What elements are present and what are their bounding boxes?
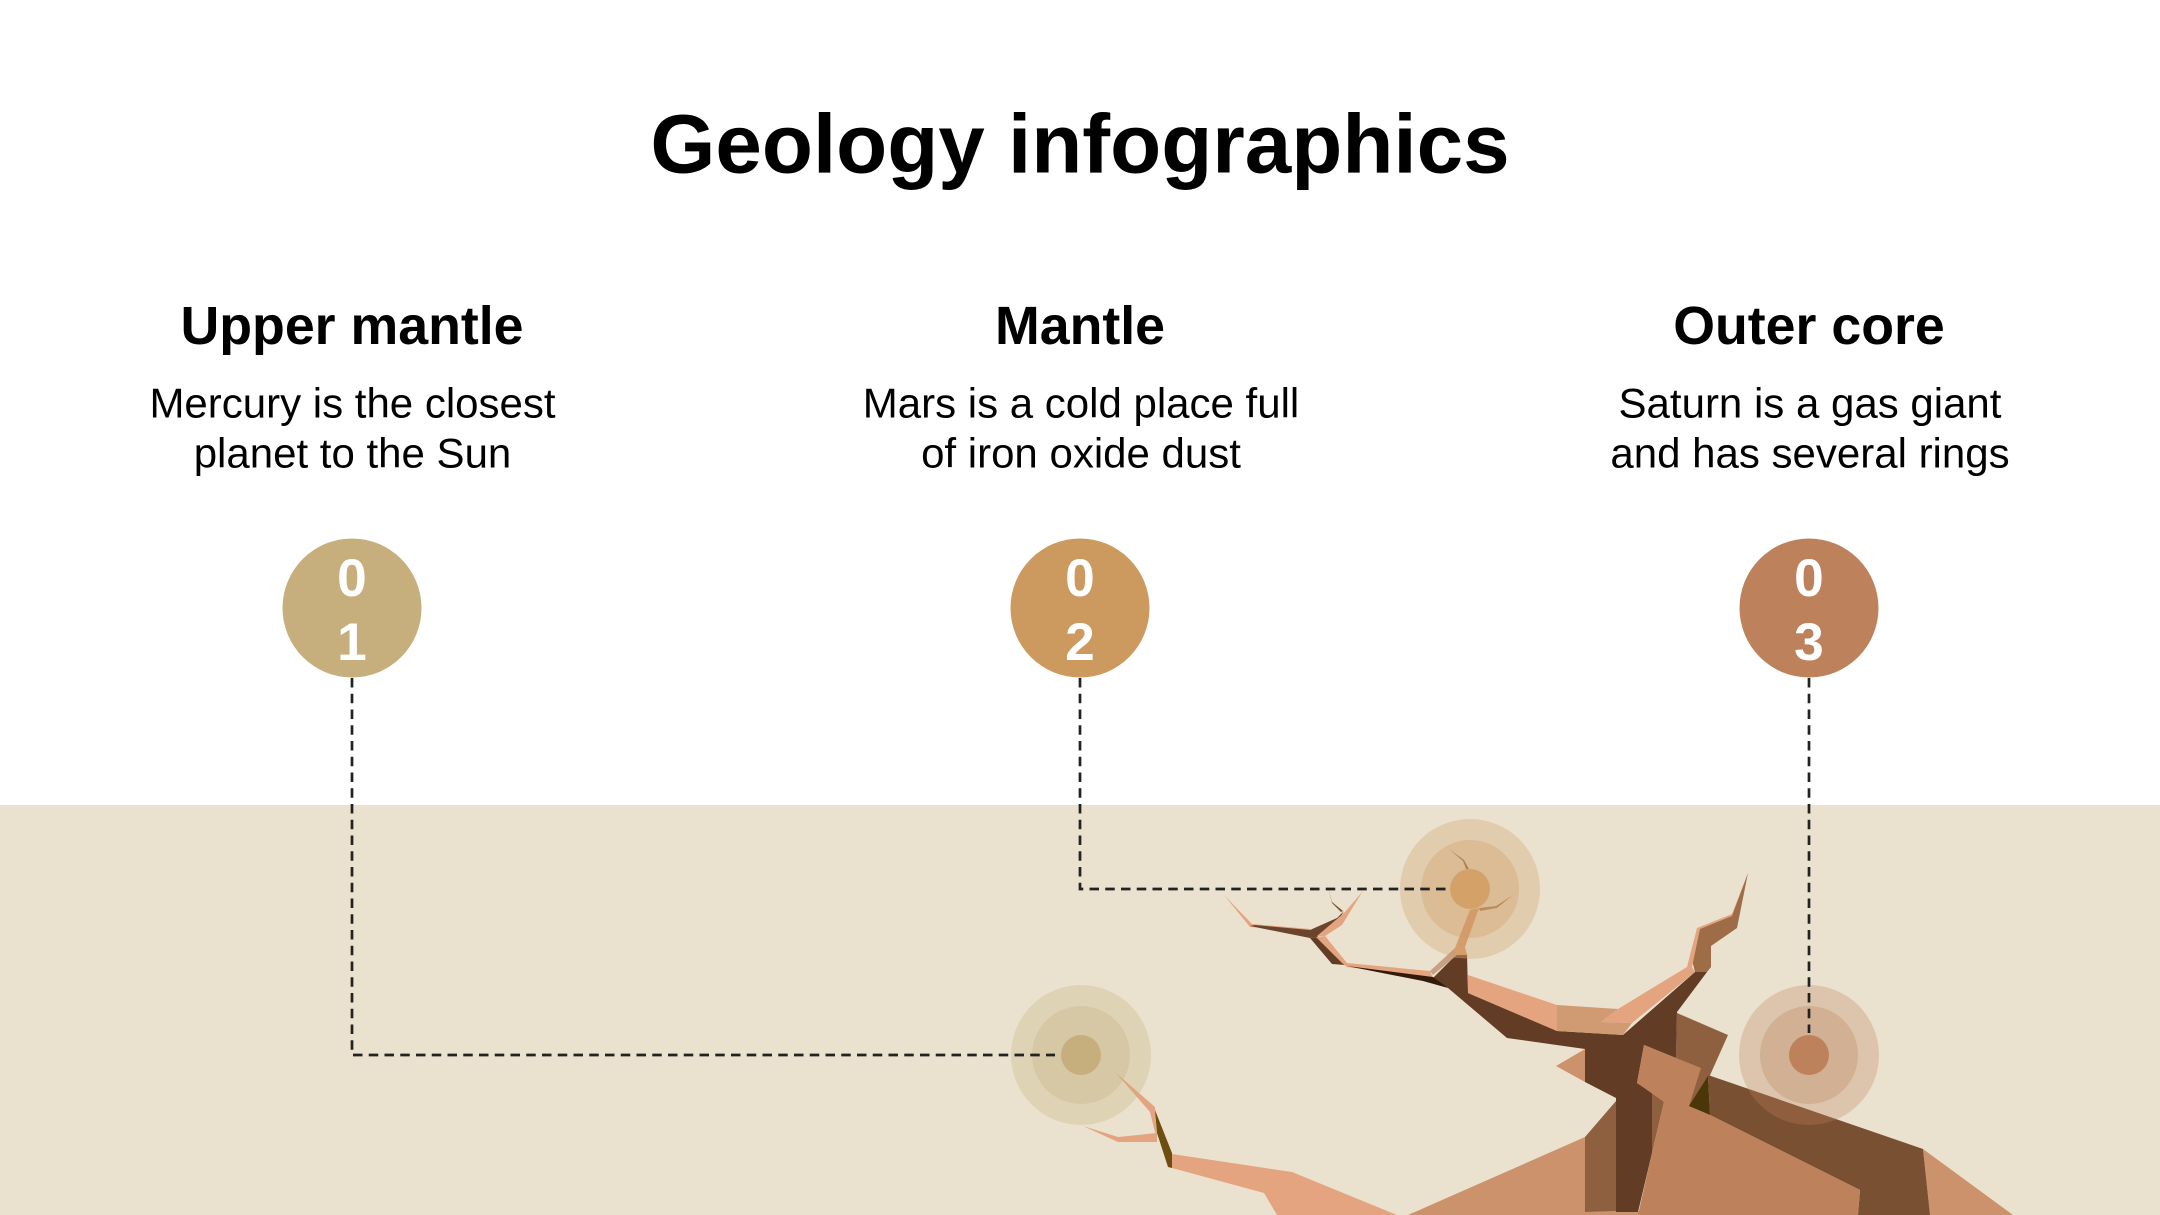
column 3: outer core text (1610, 296, 2010, 476)
connector 2 (1080, 678, 1446, 889)
description: upper mantle: Mercury is the closest (149, 380, 556, 426)
number badge 02: 0 (1065, 549, 1095, 608)
ground band (0, 805, 2160, 1215)
heading: upper mantle: Upper mantle (180, 296, 524, 356)
title: Geology infographics (650, 96, 1510, 190)
number badge 01 (282, 538, 422, 678)
number badge 01: 0 (337, 549, 367, 608)
upper right crack arm (1468, 873, 1748, 1035)
description: upper mantle: planet to the Sun (194, 430, 511, 476)
upper left crack branch (1224, 849, 1513, 988)
rock and crack illustration (1083, 849, 2013, 1215)
description: outer core: Saturn is a gas giant (1619, 380, 2002, 426)
target 3: outer core marker (1739, 985, 1879, 1125)
number badge 03: 3 (1794, 613, 1824, 672)
column 2: mantle text (863, 296, 1299, 476)
description: mantle: of iron oxide dust (921, 430, 1241, 476)
number badge 02 (1010, 538, 1150, 678)
rock body (1408, 954, 2013, 1215)
number badge 01: 1 (337, 613, 367, 672)
number badge 02: 2 (1065, 613, 1095, 672)
heading: outer core: Outer core (1673, 296, 1945, 356)
connector 1 (352, 678, 1055, 1055)
connector 3 (1808, 678, 1810, 1033)
number badge 03: 0 (1794, 549, 1824, 608)
target 1: upper mantle marker (1011, 985, 1151, 1125)
description: mantle: Mars is a cold place full (863, 380, 1299, 426)
lower left crack branch (1083, 1072, 1397, 1215)
number badge 03 (1740, 538, 1878, 678)
heading: mantle: Mantle (995, 296, 1165, 356)
target 2: mantle marker (1400, 819, 1540, 959)
column 1: upper mantle text (149, 296, 556, 476)
description: outer core: and has several rings (1610, 430, 2010, 476)
